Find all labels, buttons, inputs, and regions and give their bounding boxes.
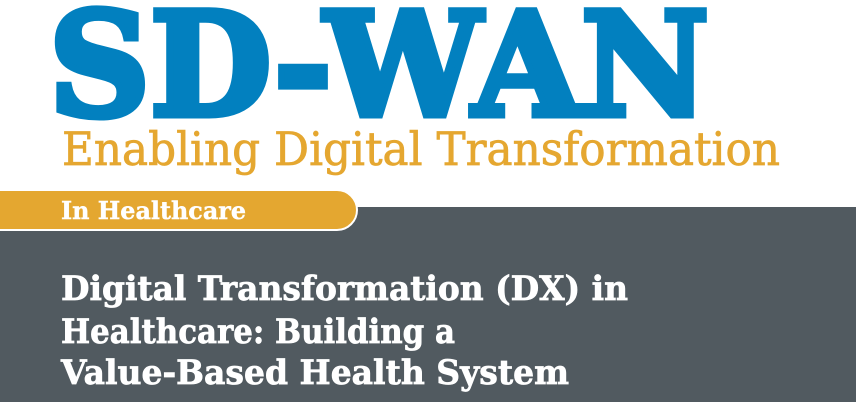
- banner: In Healthcare: [0, 190, 357, 230]
- banner label: In Healthcare: [61, 196, 246, 225]
- heading: [60, 269, 628, 393]
- heading: Digital Transformation (DX) in: [61, 269, 628, 309]
- dark grey panel: [0, 207, 856, 402]
- heading: Value-Based Health System: [60, 353, 569, 393]
- heading: Healthcare: Building a: [61, 312, 455, 352]
- banner pill: [0, 190, 357, 230]
- subtitle: Enabling Digital Transformation: [62, 122, 780, 176]
